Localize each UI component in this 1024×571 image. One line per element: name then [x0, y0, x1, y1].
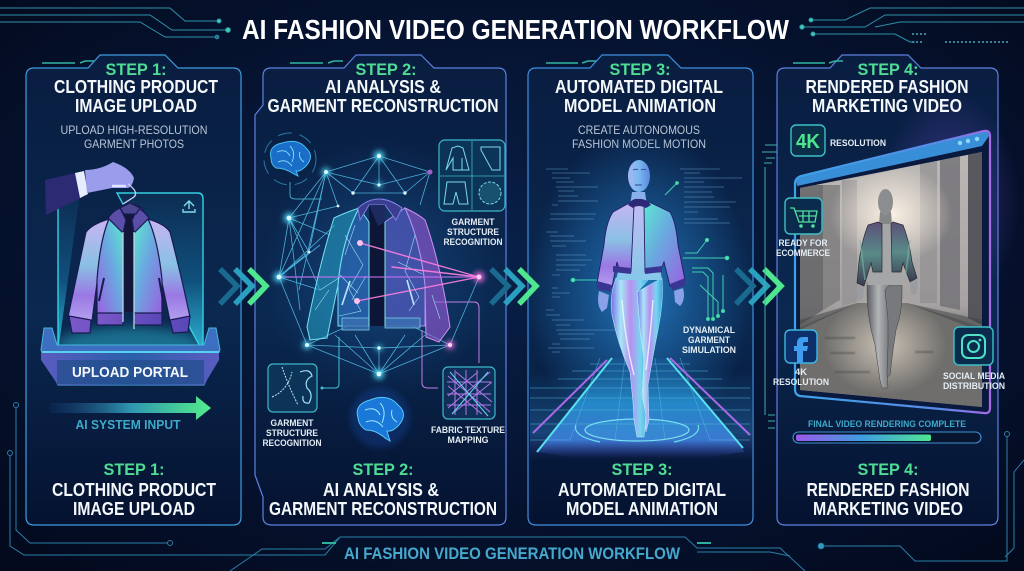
step 2 footer: STEP 2: — [352, 460, 414, 479]
step 1 footer — [52, 460, 216, 519]
step 3 footer: STEP 3: — [612, 460, 672, 479]
label: 4K resolution: RESOLUTION — [773, 377, 829, 388]
step 3 footer — [558, 460, 726, 519]
label: social media distribution: DISTRIBUTION — [943, 381, 1005, 392]
label: dynamical garment simulation: GARMENT — [688, 335, 730, 346]
step 3 header: STEP 3: — [610, 60, 670, 79]
step 1 footer: STEP 1: — [104, 460, 164, 479]
glow behind model — [528, 130, 752, 450]
label: dynamical garment simulation — [682, 325, 736, 356]
icon: pattern box — [268, 364, 317, 412]
label: garment structure recognition left: RECOGNITION — [262, 438, 322, 449]
step 3 description — [572, 123, 706, 151]
connector: simulation lines — [571, 182, 729, 320]
step 2 footer — [269, 460, 497, 519]
panel: step 2 analysis — [255, 55, 506, 525]
4K resolution badge — [791, 125, 886, 156]
upload portal base: UPLOAD PORTAL — [72, 364, 188, 381]
circuit lines: bottom — [8, 402, 1024, 571]
arrow: AI system input — [50, 396, 211, 432]
label: fabric texture mapping: MAPPING — [448, 435, 488, 446]
step 1 header: IMAGE UPLOAD — [75, 96, 197, 116]
translucent jacket — [307, 199, 450, 342]
floor grid — [530, 358, 752, 460]
side connector between step 3 and 4 — [762, 145, 777, 428]
step 1 description — [60, 123, 208, 151]
label: garment structure recognition left — [262, 418, 322, 449]
icon: brain bottom — [350, 388, 410, 448]
label: social media distribution — [943, 371, 1005, 392]
render progress bar — [793, 419, 981, 443]
step 4 footer — [806, 460, 970, 519]
video model — [856, 189, 918, 388]
arrow: step 3 to 4 — [736, 269, 781, 304]
label: fabric texture mapping: FABRIC TEXTURE — [431, 425, 505, 436]
step 2 footer: GARMENT RECONSTRUCTION — [269, 499, 497, 519]
step 4 footer: MARKETING VIDEO — [813, 499, 963, 519]
main title: AI FASHION VIDEO GENERATION WORKFLOW — [242, 14, 789, 45]
label: social media distribution: SOCIAL MEDIA — [943, 371, 1005, 382]
circuit lines: top left — [0, 8, 230, 39]
step 4 header: RENDERED FASHION — [806, 77, 968, 97]
step 4 header: STEP 4: — [858, 60, 918, 79]
step 3 footer: AUTOMATED DIGITAL — [558, 480, 726, 500]
step 2 header — [268, 60, 498, 116]
icon: facebook — [785, 330, 817, 363]
label: fabric texture mapping — [431, 425, 505, 446]
step 4 header: MARKETING VIDEO — [812, 96, 962, 116]
panel: step 4 video — [773, 55, 1020, 525]
panel: step 3 animation — [528, 55, 753, 525]
step 2 header: AI ANALYSIS & — [325, 77, 441, 97]
icon: instagram — [954, 327, 993, 365]
jacket — [68, 203, 190, 333]
connector lines — [290, 182, 479, 390]
step 2 footer: AI ANALYSIS & — [323, 480, 439, 500]
step 4 footer: STEP 4: — [858, 460, 918, 479]
network nodes — [274, 151, 484, 379]
code text blocks — [546, 169, 742, 352]
step 3 header — [555, 60, 723, 116]
step 3 description: FASHION MODEL MOTION — [572, 137, 706, 151]
4K resolution badge: RESOLUTION — [830, 138, 886, 149]
4K resolution badge: 4K — [796, 131, 821, 153]
label: garment structure recognition right: STRUCTURE — [447, 227, 499, 238]
footer banner title: AI FASHION VIDEO GENERATION WORKFLOW — [344, 545, 680, 563]
step 1 header: STEP 1: — [106, 60, 166, 79]
step 3 footer: MODEL ANIMATION — [566, 499, 718, 519]
label: garment structure recognition left: STRUCTURE — [266, 428, 318, 439]
step 1 header: CLOTHING PRODUCT — [54, 77, 218, 97]
arrow: step 2 to 3 — [491, 269, 536, 304]
label: dynamical garment simulation: SIMULATION — [682, 345, 736, 356]
label: ready for ecommerce: ECOMMERCE — [776, 248, 830, 259]
upload portal base — [41, 328, 220, 385]
step 3 description: CREATE AUTONOMOUS — [578, 123, 700, 137]
label: ready for ecommerce — [776, 238, 830, 259]
circuit lines: top right — [800, 8, 1024, 42]
neural network — [279, 156, 479, 374]
label: garment structure recognition right: GARMENT — [452, 217, 495, 228]
step 2 header: GARMENT RECONSTRUCTION — [268, 96, 498, 116]
arrow: AI system input: AI SYSTEM INPUT — [76, 417, 181, 432]
icon: brain top — [264, 133, 316, 185]
step 1 header — [54, 60, 218, 116]
hand holding hanger — [45, 162, 136, 215]
label: 4K resolution — [773, 367, 829, 388]
step 1 description: GARMENT PHOTOS — [84, 137, 184, 151]
arrow: step 1 to 2 — [220, 269, 266, 304]
label: garment structure recognition right — [444, 217, 503, 248]
label: garment structure recognition right: RECOGNITION — [444, 237, 503, 248]
upload portal frame — [55, 193, 205, 363]
laser beams — [279, 240, 479, 304]
step 4 footer: RENDERED FASHION — [806, 480, 970, 500]
icon: fabric texture box — [443, 367, 495, 419]
panel: step 1 upload — [26, 55, 241, 525]
icon: shopping cart — [785, 198, 822, 234]
step 3 header: AUTOMATED DIGITAL — [555, 77, 723, 97]
step 1 footer: CLOTHING PRODUCT — [52, 480, 216, 500]
render progress bar: FINAL VIDEO RENDERING COMPLETE — [808, 419, 966, 430]
label: 4K resolution: 4K — [795, 367, 807, 378]
step 2 header: STEP 2: — [356, 60, 416, 79]
digital model with jacket — [597, 160, 685, 437]
label: garment structure recognition left: GARMENT — [270, 418, 314, 429]
icon: garment structure box — [439, 140, 505, 211]
step 1 description: UPLOAD HIGH-RESOLUTION — [60, 123, 208, 137]
label: ready for ecommerce: READY FOR — [778, 238, 828, 249]
label: dynamical garment simulation: DYNAMICAL — [683, 325, 735, 336]
step 1 footer: IMAGE UPLOAD — [73, 499, 195, 519]
step 3 header: MODEL ANIMATION — [564, 96, 716, 116]
step 4 header — [806, 60, 968, 116]
video window — [795, 131, 990, 413]
